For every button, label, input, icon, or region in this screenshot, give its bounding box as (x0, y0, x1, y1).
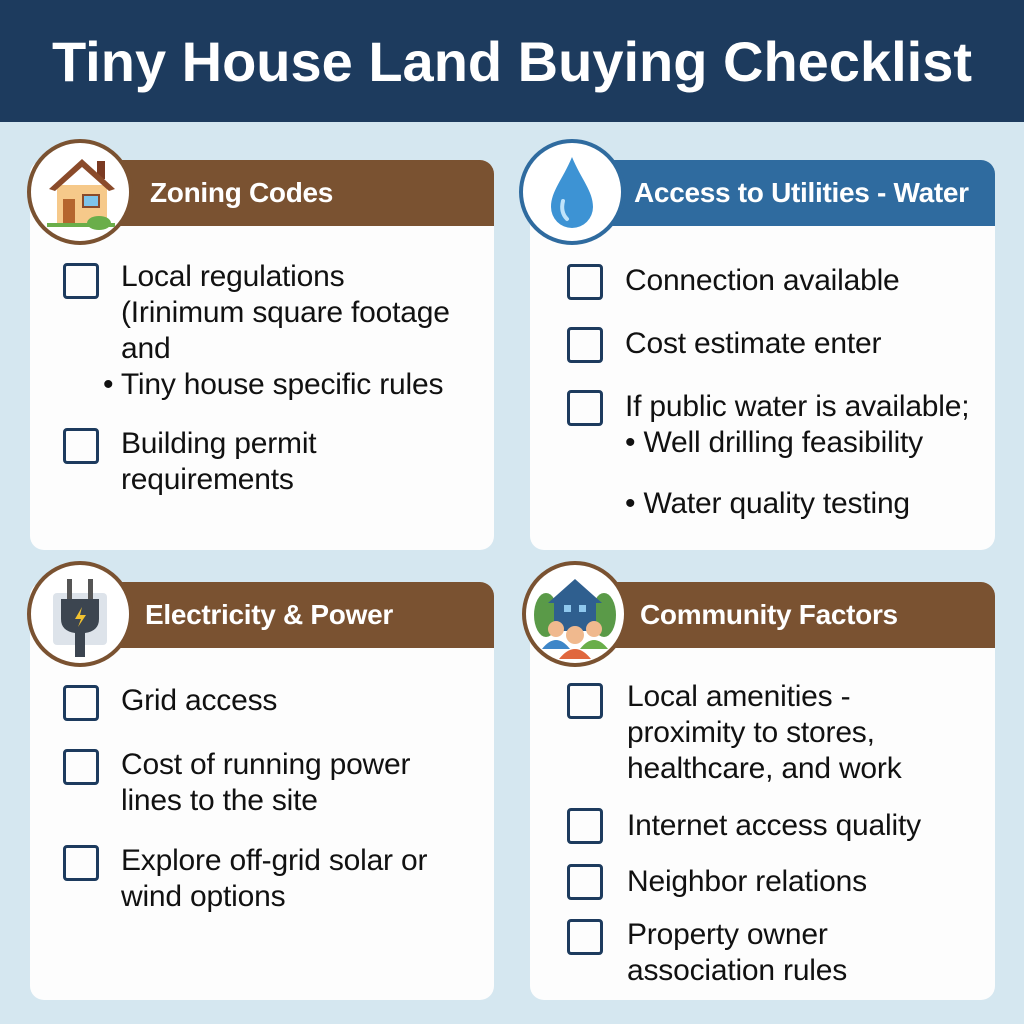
panel: zoning codes: (Irinimum square footage (121, 296, 450, 329)
panel: community: Internet access quality (627, 809, 921, 842)
header: zoning codes: Zoning Codes (150, 177, 333, 208)
icon: plug (27, 561, 133, 667)
panel: community: Property owner (627, 918, 828, 951)
panel: electricity: Grid access (121, 684, 277, 717)
checkbox item: power lines (63, 748, 410, 817)
checkbox item: connection (567, 264, 900, 300)
header: zoning codes (100, 160, 494, 226)
icon: water drop (519, 139, 625, 245)
panel: community: healthcare, and work (627, 752, 902, 785)
panel: water (530, 160, 995, 550)
checkbox item: off-grid (63, 844, 427, 913)
panel: electricity: Cost of running power (121, 748, 410, 781)
panel: community: association rules (627, 954, 847, 987)
panel: water: Connection available (625, 264, 900, 297)
panel: zoning codes (30, 160, 494, 550)
panel: zoning codes: • Tiny house specific rules (103, 368, 443, 401)
panel: water: • Water quality testing (625, 487, 910, 520)
header: community (600, 582, 995, 648)
icon: community (522, 561, 628, 667)
checkbox item: local regulations (63, 260, 450, 401)
title (0, 0, 1024, 122)
checkbox item: cost estimate (567, 327, 881, 363)
checkbox item: internet (567, 808, 921, 844)
header: water: Access to Utilities - Water (634, 177, 969, 208)
panel: electricity: wind options (121, 880, 285, 913)
panel: zoning codes: Building permit (121, 427, 316, 460)
header: water (600, 160, 995, 226)
checkbox item: grid access (63, 684, 277, 721)
panel: water: If public water is available; (625, 390, 969, 423)
panel: zoning codes: and (121, 332, 170, 365)
panel: community: proximity to stores, (627, 716, 875, 749)
panel: water: Cost estimate enter (625, 327, 881, 360)
panel: electricity (30, 582, 494, 1000)
panel: electricity: lines to the site (121, 784, 318, 817)
header: electricity (100, 582, 494, 648)
header: electricity: Electricity & Power (145, 599, 393, 630)
checkbox item: building permit (63, 427, 316, 496)
panel: water: • Well drilling feasibility (625, 426, 923, 459)
header: community: Community Factors (640, 599, 898, 630)
icon: house (27, 139, 133, 245)
checkbox item: public water (567, 390, 969, 520)
checkbox item: amenities (567, 680, 902, 785)
panel: community: Local amenities - (627, 680, 850, 713)
panel: zoning codes: Local regulations (121, 260, 344, 293)
checkbox item: neighbors (567, 864, 867, 900)
panel: electricity: Explore off-grid solar or (121, 844, 427, 877)
panel: community: Neighbor relations (627, 865, 867, 898)
checkbox item: association (567, 918, 847, 987)
panel: zoning codes: requirements (121, 463, 294, 496)
title: Tiny House Land Buying Checklist (52, 30, 972, 93)
panel: community (530, 582, 995, 1000)
